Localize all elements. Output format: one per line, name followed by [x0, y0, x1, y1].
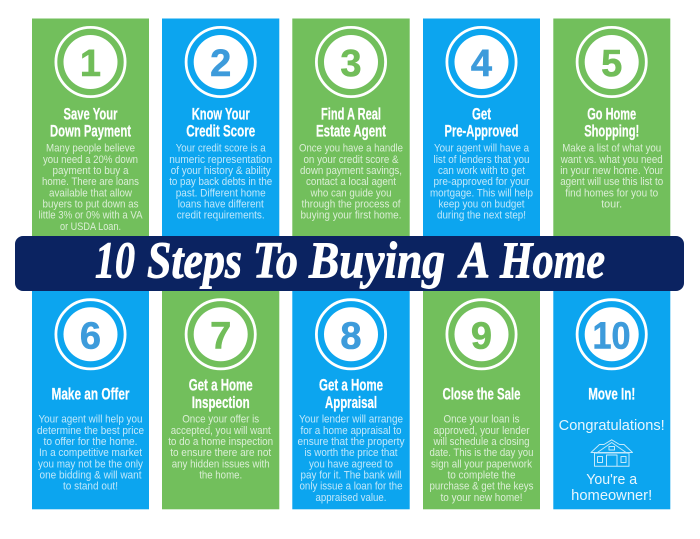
text: step 1: you need a 20% down	[43, 154, 138, 166]
text: step 4: pre-approved for your	[434, 176, 530, 188]
panel: step 6	[32, 290, 149, 509]
text: step 5: agent will use this list to	[560, 176, 663, 188]
text: step 1	[38, 143, 143, 233]
heading: step 8: Appraisal	[325, 393, 377, 412]
text: step 8: is worth the price that	[304, 447, 398, 459]
text: step 6: to stand out!	[63, 481, 118, 493]
text: step 7: to do a home inspection	[168, 436, 273, 448]
text: step 6: one bidding & will want	[40, 470, 142, 482]
title: 10	[95, 232, 135, 290]
text: step 8	[298, 414, 405, 504]
text: step 4: during the next step!	[437, 210, 526, 222]
text: step 4: Your agent will have a	[434, 143, 529, 155]
heading: step 5: Go Home	[587, 104, 636, 124]
text: step 6: In a competitive market	[39, 447, 142, 459]
text: step 9: Once your loan is	[444, 414, 520, 426]
text: step 9: date. This is the day you	[430, 447, 534, 459]
text: step 2: past. Different home	[176, 187, 266, 199]
text: step 9: to complete the	[448, 470, 516, 482]
text: step 9: will schedule a closing	[433, 436, 530, 448]
heading: step 1: Down Payment	[50, 122, 131, 140]
heading: step 7: Get a Home	[189, 376, 253, 394]
heading: step 5: Shopping!	[584, 122, 639, 140]
text: step 7: the home.	[199, 470, 242, 482]
heading: step 8	[319, 376, 383, 412]
heading: step 4: Get	[472, 104, 491, 124]
text: step 1: payment to buy a	[52, 165, 128, 177]
heading: step 2: Know Your	[192, 104, 250, 124]
heading: step 10: Move In!	[588, 384, 635, 404]
text: step 5	[560, 143, 664, 211]
heading: step 2: Credit Score	[186, 122, 255, 140]
text: step 6: you may not be the only	[38, 458, 144, 470]
panel: step 9	[423, 290, 540, 509]
text: step 1: or USDA Loan.	[60, 221, 121, 233]
text: you're a homeowner: You're a	[586, 472, 637, 488]
text: step 1: home. There are loans	[42, 176, 140, 188]
panel: step 10	[553, 290, 670, 509]
text: step 1: little 3% or 0% with a VA	[38, 210, 143, 222]
text: step 2: to pay back debts in the	[169, 176, 272, 188]
text: step 3	[299, 143, 403, 222]
text: step 5: find homes for you to	[565, 187, 658, 199]
text: step 2: Your credit score is a	[176, 143, 266, 155]
heading: step 8: Get a Home	[319, 376, 383, 394]
panel: step 8	[292, 290, 410, 509]
icon: house	[591, 440, 632, 466]
text: step 3: buying your first home.	[300, 210, 402, 222]
heading: step 6: Make an Offer	[52, 384, 130, 404]
icon: number 2	[186, 27, 255, 97]
text: step 3: through the process of	[302, 199, 401, 211]
title: To	[253, 232, 298, 290]
heading: step 9: Close the Sale	[442, 384, 520, 404]
icon: number 2: 2	[210, 43, 231, 85]
text: step 2: loans have different	[178, 199, 264, 211]
text: step 5: Make a list of what you	[562, 143, 661, 155]
text: step 3: contact a local agent	[306, 176, 396, 188]
icon: number 1	[56, 27, 125, 97]
icon: number 7	[186, 300, 255, 369]
icon: number 10	[577, 300, 646, 369]
text: step 6	[37, 414, 144, 493]
text: step 5: tour.	[601, 199, 622, 211]
text: step 7: to ensure there are not	[170, 447, 271, 459]
heading: step 7: Inspection	[192, 393, 250, 412]
heading: step 2	[186, 104, 255, 140]
text: step 2: of your history & ability	[171, 165, 271, 177]
icon: number 1: 1	[80, 43, 101, 85]
heading: step 7	[189, 376, 253, 412]
text: step 3: on your credit score &	[304, 154, 399, 166]
text: step 9: purchase & get the keys	[430, 481, 534, 493]
title: Steps	[147, 232, 242, 290]
text: step 9: to your new home!	[440, 492, 522, 504]
banner	[15, 236, 684, 291]
text: step 2: credit requirements.	[177, 210, 265, 222]
text: step 9	[430, 414, 534, 504]
heading: step 1: Save Your	[64, 104, 118, 124]
text: you're a homeowner	[571, 472, 652, 504]
icon: number 6: 6	[80, 316, 101, 358]
icon: number 4: 4	[471, 43, 492, 85]
text: step 9: sign all your paperwork	[431, 458, 533, 470]
icon: number 5	[577, 27, 646, 97]
text: step 1: buyers to put down as	[42, 199, 139, 211]
text: step 4	[430, 143, 533, 222]
text: step 7	[168, 414, 273, 482]
icon: number 5: 5	[601, 43, 622, 85]
text: step 7: Once your offer is	[182, 414, 260, 426]
text: step 8: for a home appraisal to	[300, 425, 402, 437]
panel: step 2	[162, 18, 279, 236]
text: step 7: any hidden issues with	[172, 458, 270, 470]
icon: number 10: 10	[592, 316, 630, 358]
text: step 5: want vs. what you need	[560, 154, 663, 166]
icon: number 4	[447, 27, 516, 97]
text: step 6: determine the best price	[37, 425, 144, 437]
title	[95, 232, 605, 290]
text: step 8: Your lender will arrange	[299, 414, 403, 426]
text: step 7: accepted, you will want	[171, 425, 271, 437]
text: step 6: to offer for the home.	[44, 436, 138, 448]
heading: step 1	[50, 104, 131, 140]
text: step 4: keep you on budget	[438, 199, 524, 211]
text: step 4: mortgage. This will help	[430, 187, 533, 199]
title: A	[457, 232, 490, 290]
text: step 8: pay for it. The bank will	[300, 470, 402, 482]
text: step 1: available that allow	[49, 187, 132, 199]
icon: number 7: 7	[210, 316, 231, 358]
panel: step 5	[553, 18, 670, 236]
icon: number 9	[447, 300, 516, 369]
icon: number 8: 8	[340, 316, 362, 358]
icon: number 9: 9	[471, 316, 492, 358]
heading: step 5	[584, 104, 639, 140]
text: step 1: Many people believe	[46, 143, 135, 155]
text: step 3: Once you have a handle	[299, 143, 403, 155]
text: congratulations: Congratulations!	[559, 418, 665, 434]
panel: step 4	[423, 18, 540, 236]
panel: step 1	[32, 18, 149, 236]
text: step 5: in your new home. Your	[560, 165, 664, 177]
heading: step 3	[316, 104, 386, 140]
panel: step 3	[292, 18, 410, 236]
text: step 2	[169, 143, 272, 222]
text: step 3: who can guide you	[310, 187, 392, 199]
text: step 4: list of lenders that you	[434, 154, 530, 166]
heading: step 4	[444, 104, 518, 140]
icon: number 8	[316, 300, 386, 369]
text: step 8: you have agreed to	[309, 458, 393, 470]
icon: number 3: 3	[340, 43, 362, 85]
text: step 8: ensure that the property	[298, 436, 405, 448]
panel: step 7	[162, 290, 279, 509]
text: you're a homeowner: homeowner!	[571, 488, 652, 504]
text: step 4: can work with to get	[438, 165, 525, 177]
icon: number 6	[56, 300, 125, 369]
text: step 9: approved, your lender	[434, 425, 530, 437]
title: Buying	[308, 232, 445, 290]
icon: number 3	[316, 27, 386, 97]
heading: step 4: Pre-Approved	[444, 122, 518, 140]
title: Home	[499, 232, 605, 290]
text: step 8: appraised value.	[316, 492, 386, 504]
text: step 8: only issue a loan for the	[300, 481, 402, 493]
heading: step 3: Estate Agent	[316, 122, 386, 140]
text: step 3: down payment savings,	[300, 165, 402, 177]
heading: step 3: Find A Real	[321, 104, 381, 124]
text: step 6: Your agent will help you	[38, 414, 142, 426]
text: step 2: numeric representation	[169, 154, 272, 166]
